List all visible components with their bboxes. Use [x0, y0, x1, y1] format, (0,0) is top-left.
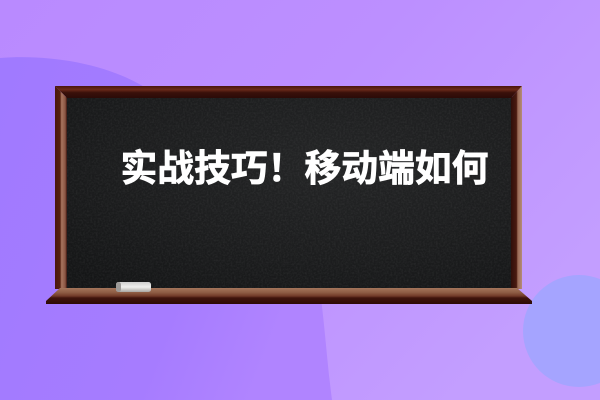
- board grain: [66, 97, 512, 289]
- frame: top rail: [55, 86, 522, 98]
- frame: left rail: [55, 86, 67, 289]
- board surface: [66, 97, 512, 289]
- background shape: large violet, left: [0, 57, 332, 400]
- title text: 实战技巧！移动端如何: [120, 148, 488, 189]
- frame: right rail: [511, 86, 522, 289]
- chalkboard: [46, 86, 532, 304]
- background circle: blue, lower right: [523, 275, 600, 387]
- frame: bottom ledge: [46, 288, 532, 304]
- chalk piece: [116, 282, 151, 292]
